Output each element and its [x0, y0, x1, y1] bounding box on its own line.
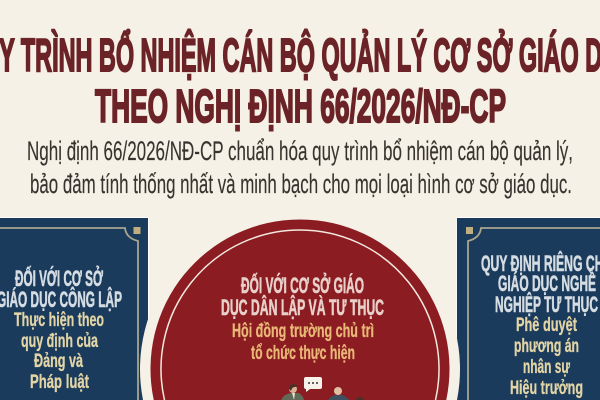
title — [0, 29, 600, 132]
icon: speech bubble — [304, 377, 322, 392]
panel body text: quy định của — [21, 331, 98, 352]
panel heading: ĐỐI VỚI CƠ SỞ — [15, 265, 103, 291]
panel heading: GIÁO DỤC CÔNG LẬP — [0, 287, 122, 312]
icon: right person — [328, 387, 349, 400]
circle body text — [232, 321, 374, 364]
circle heading: DỤC DÂN LẬP VÀ TƯ THỤC — [221, 295, 384, 320]
corner ornament — [134, 227, 140, 234]
panel body text: Thực hiện theo — [14, 310, 104, 331]
panel: public institutions — [0, 217, 149, 400]
panel body text — [510, 315, 583, 399]
intro text block — [27, 136, 573, 199]
circle body text: Hội đồng trường chủ trì — [232, 321, 374, 342]
circle heading: ĐỐI VỚI CƠ SỞ GIÁO — [241, 272, 364, 298]
panel frame — [468, 228, 600, 400]
icon: left person — [281, 384, 304, 400]
panel: private institutions circle — [140, 209, 460, 400]
circle heading — [221, 272, 384, 320]
panel heading — [0, 265, 122, 312]
panel body text: Pháp luật — [30, 372, 89, 393]
circle body text: tổ chức thực hiện — [251, 343, 355, 364]
panel heading — [481, 251, 600, 317]
panel frame — [0, 228, 138, 400]
panel body text: Đảng và — [34, 351, 83, 372]
corner ornament — [466, 227, 473, 234]
icon: third person — [356, 397, 364, 400]
panel: vocational private institutions — [456, 217, 600, 400]
panel body text — [14, 310, 104, 393]
panel body text: nhân sự — [523, 357, 570, 378]
